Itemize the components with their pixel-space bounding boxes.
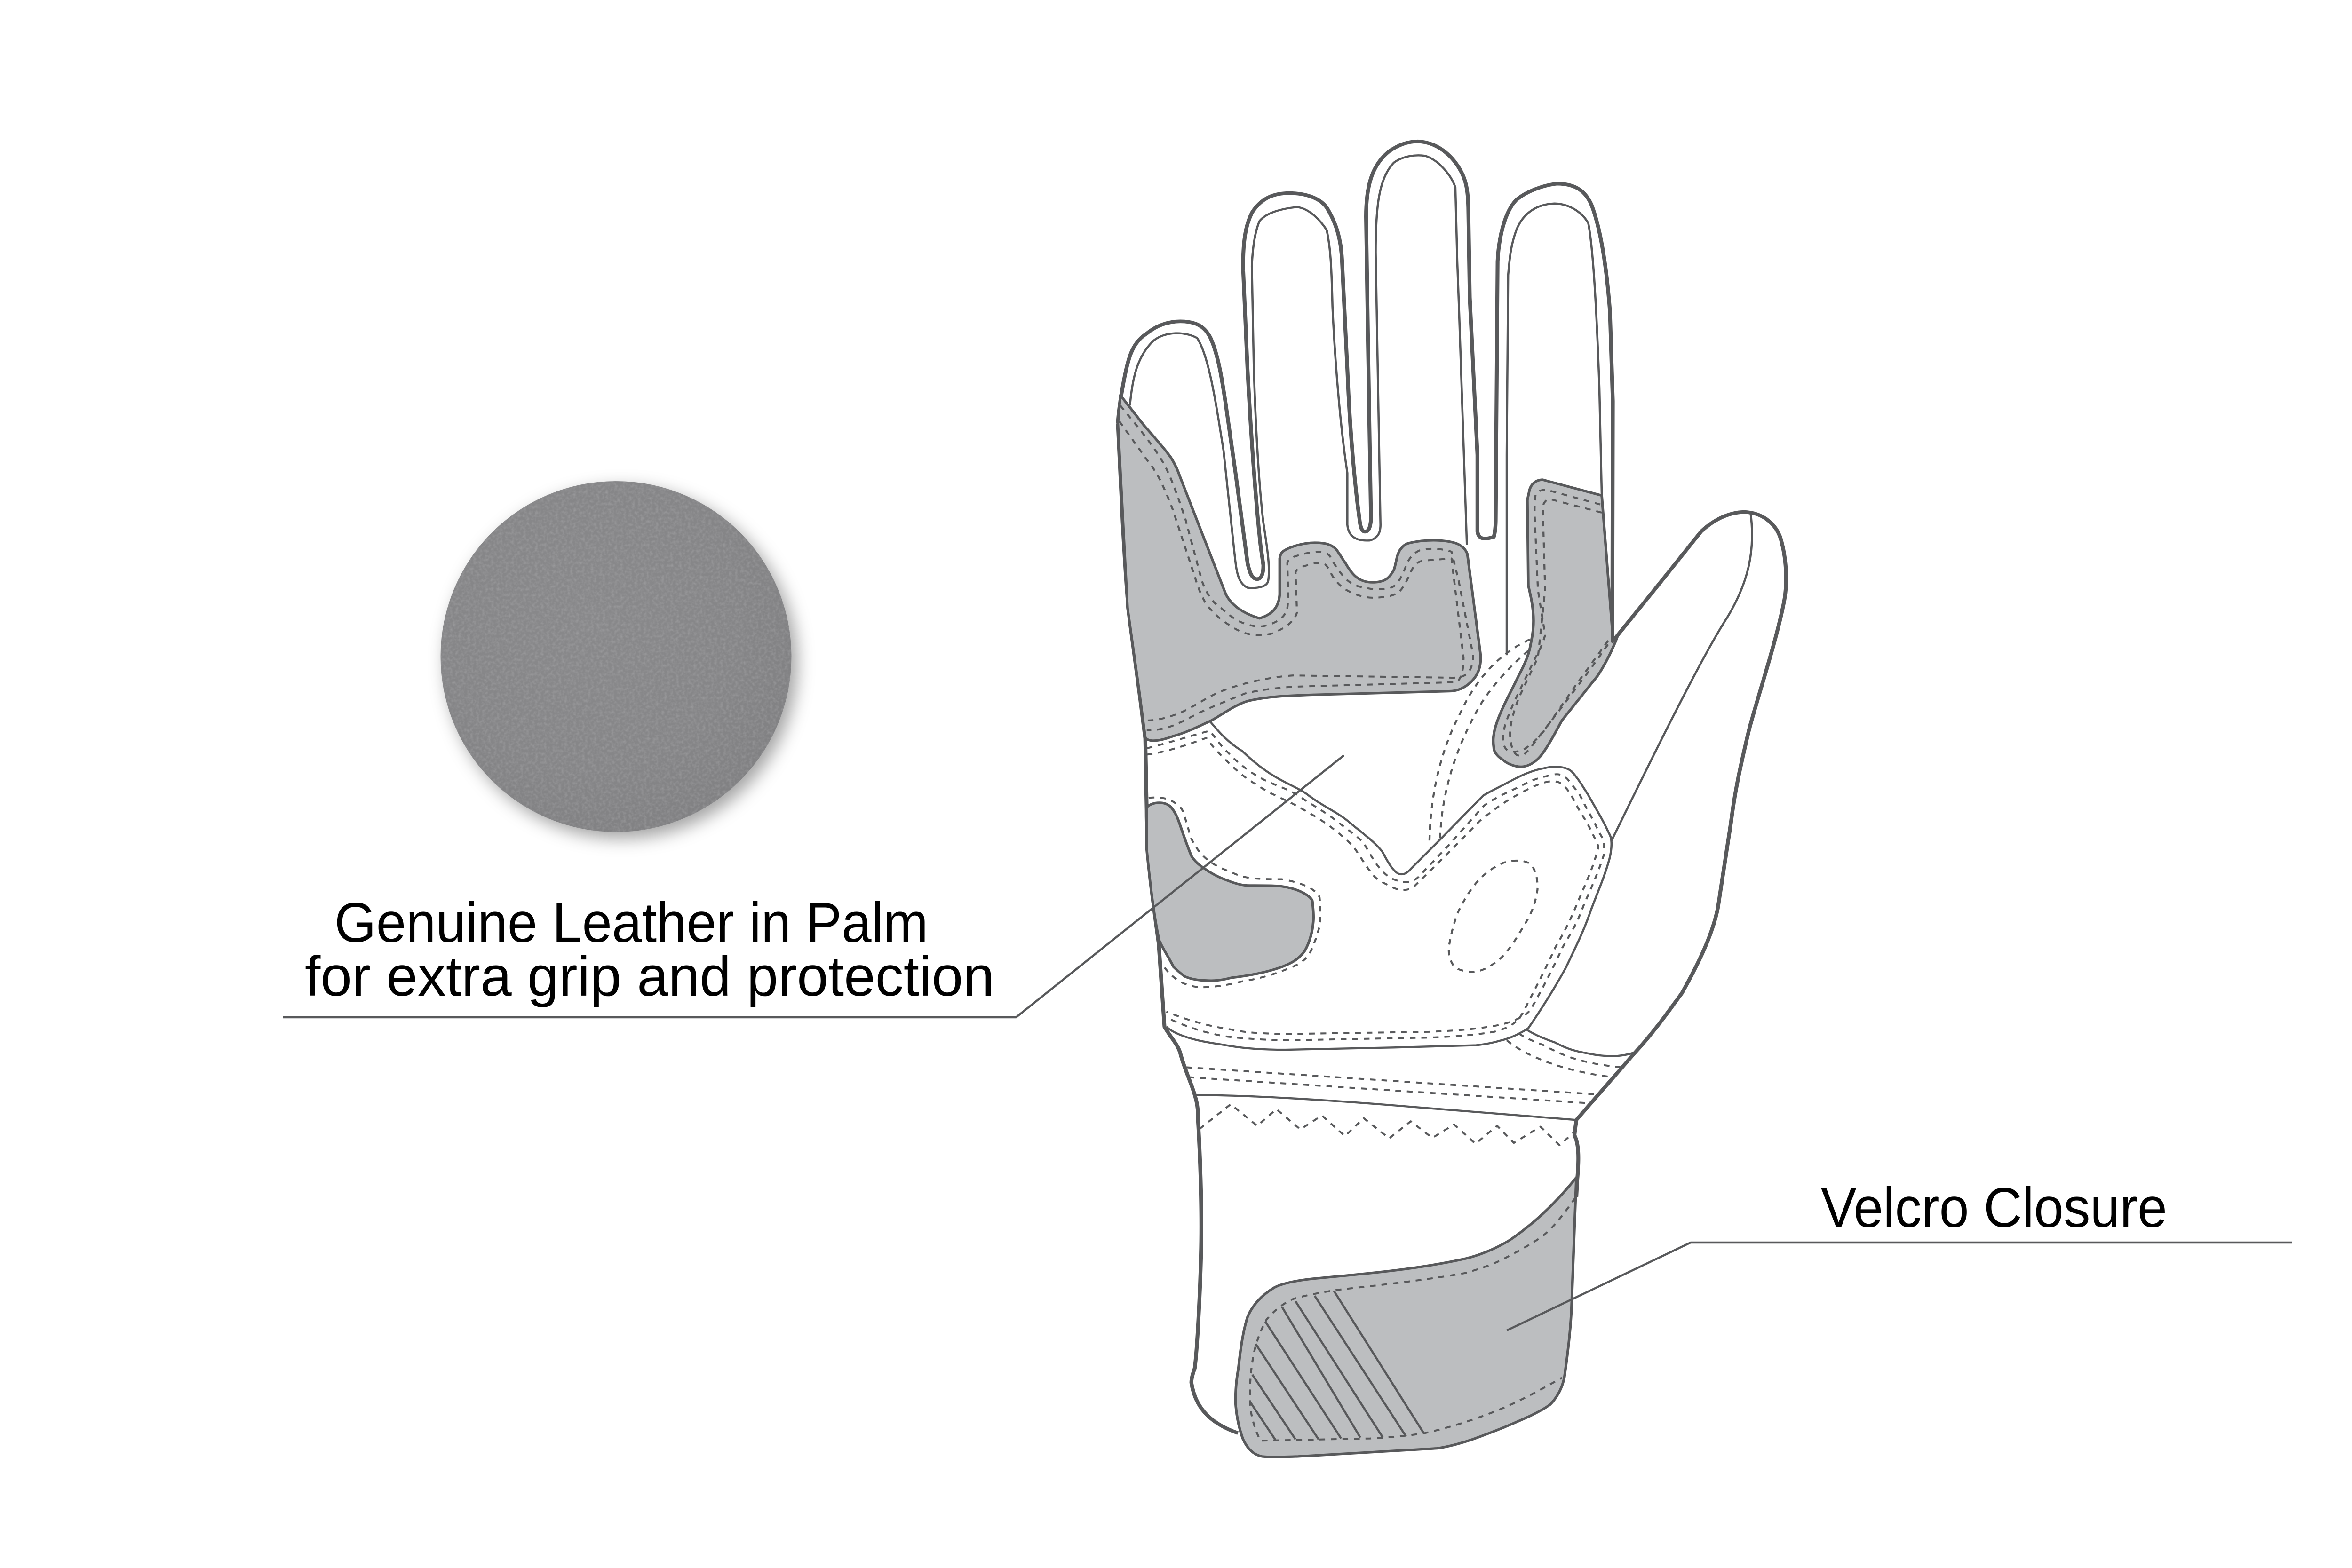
label: genuine leather in palm (305, 891, 994, 1008)
label: genuine leather in palm: Genuine Leather in Palm (334, 891, 928, 954)
velcro closure tab (1236, 1178, 1576, 1457)
leader line: palm leather (283, 755, 1344, 1017)
velcro hatch lines (1250, 1291, 1424, 1440)
label: velcro closure: Velcro Closure (1821, 1176, 2167, 1239)
leader line: velcro closure (1507, 1243, 2292, 1330)
glove illustration (1118, 142, 1786, 1457)
palm stitching (1147, 640, 1604, 1040)
palm oval stitching (1449, 861, 1538, 972)
knuckle leather patch (1118, 395, 1481, 741)
wrist band stitching (1186, 1034, 1622, 1103)
thumb inner seam (1612, 513, 1752, 841)
palm heel leather patch (1147, 798, 1320, 987)
index finger leather patch (1493, 480, 1618, 767)
palm seam lines (1167, 721, 1634, 1120)
glove outer outline (1118, 142, 1786, 1433)
finger inner seams (1130, 155, 1602, 655)
leather texture swatch (440, 481, 791, 832)
elastic zigzag stitching (1200, 1104, 1576, 1145)
label: genuine leather in palm: for extra grip and protection (305, 945, 994, 1008)
